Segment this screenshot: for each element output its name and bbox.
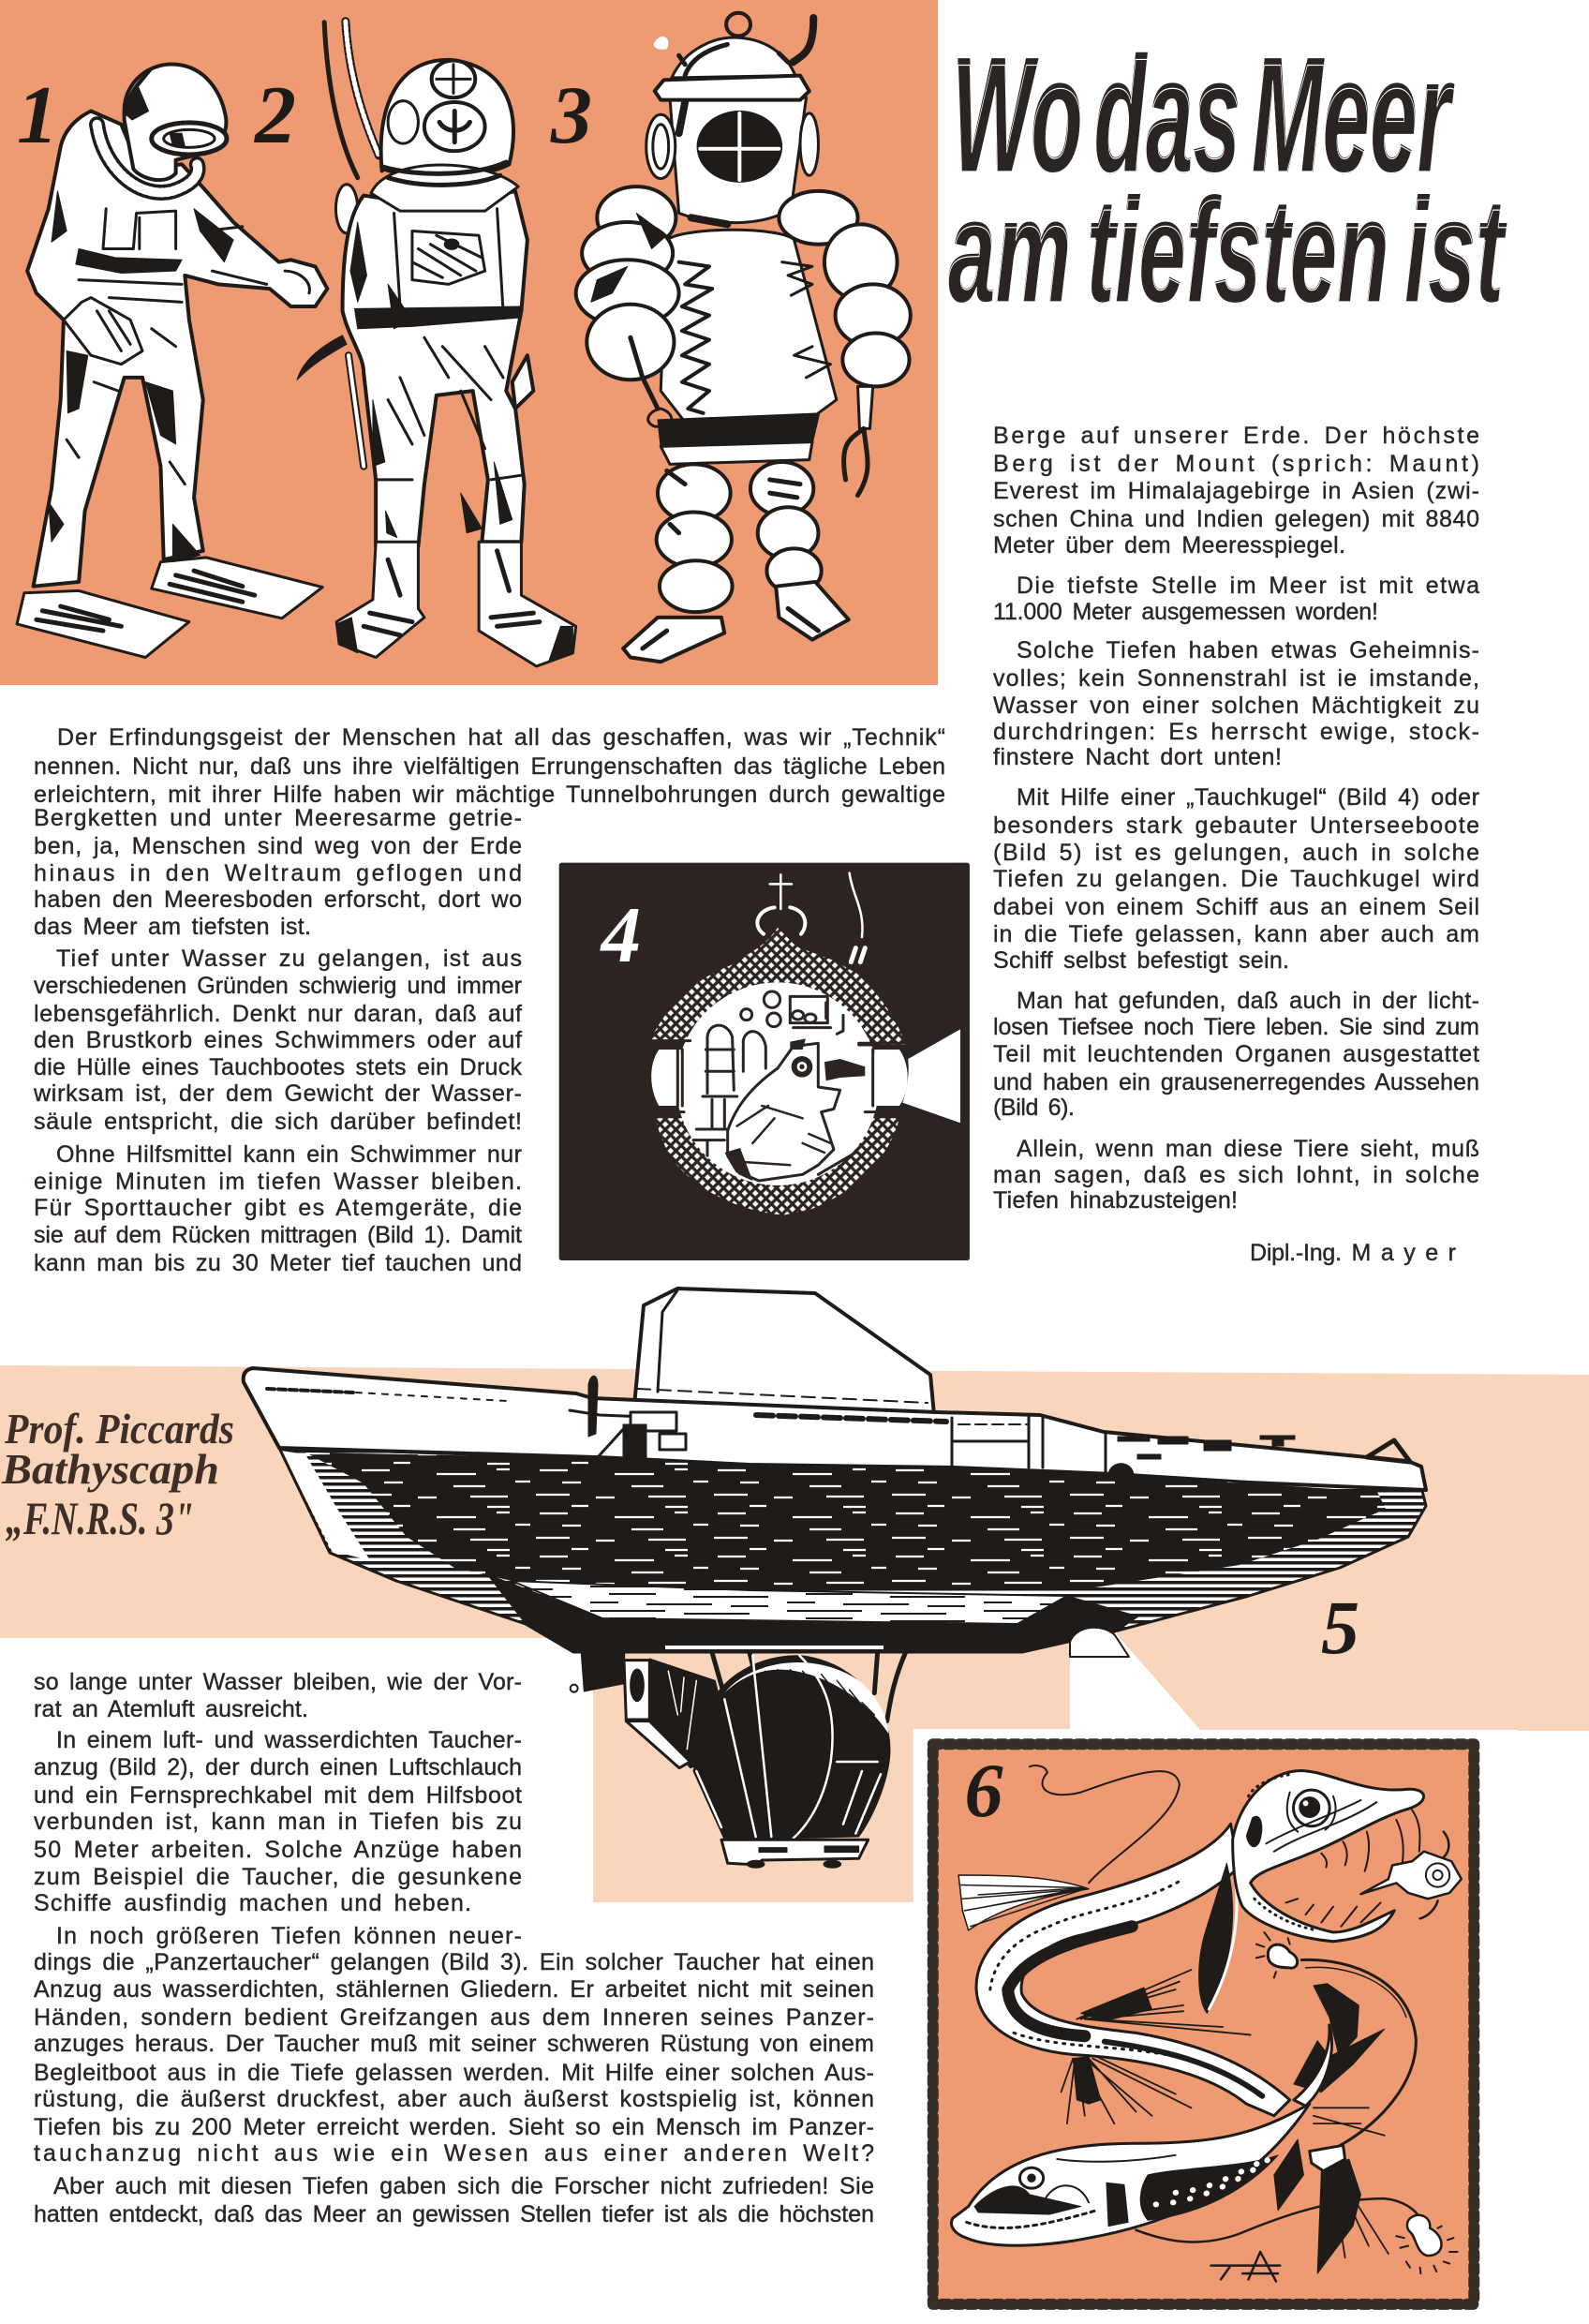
base frame: [721, 1840, 869, 1865]
text block: intro left column: kann man bis zu 30 Meter tief tauchen und: [34, 1250, 522, 1276]
hook and cable: [757, 873, 865, 962]
text block: intro left column: Ohne Hilfsmittel kann ein Schwimmer nur: [56, 1141, 522, 1168]
lower whisker and lure: [1136, 2198, 1458, 2273]
text block: right column: man sagen, daß es sich lohnt, in solche: [993, 1162, 1479, 1188]
long whisker: [1030, 1765, 1180, 1883]
text block: bottom left column: Begleitboot aus in die Tiefe gelassen werden. Mit Hilfe einer solchen Aus-: [34, 2060, 874, 2086]
text block: bottom left column: anzug (Bild 2), der durch einen Luftschlauch: [34, 1754, 522, 1780]
oxygen tanks and instruments: [693, 991, 874, 1155]
text block: right column: dabei von einem Schiff aus an einem Seil: [993, 894, 1479, 920]
dark pectoral fin: [1199, 1863, 1233, 2013]
right arm blobs and claw: [779, 191, 911, 496]
text block: bottom left column: dings die „Panzertaucher“ gelangen (Bild 3). Ein solcher Taucher hat einen: [34, 1949, 874, 1975]
text block: right column: Solche Tiefen haben etwas Geheimnis-: [1017, 637, 1479, 663]
text block: right column: 11.000 Meter ausgemessen worden!: [993, 599, 1378, 625]
submarine illustration 5: [244, 1289, 1426, 1657]
notch behind keel: [1070, 1628, 1129, 1657]
text block: right column: besonders stark gebauter Unterseeboote: [993, 812, 1479, 839]
diver numbers 1 2 3: 1: [17, 70, 58, 161]
sphere highlights: [724, 1662, 888, 1734]
light beam: [902, 1029, 960, 1123]
white upper deck: [244, 1368, 1426, 1490]
text block: right column: (Bild 6).: [993, 1095, 1075, 1121]
lure stalk and lure: [1256, 1932, 1416, 2152]
text block: bottom left column: zum Beispiel die Taucher, die gesunkene: [34, 1864, 522, 1890]
text block: intro left column: den Brustkorb eines Schwimmers oder auf: [34, 1027, 522, 1053]
white mount box: [624, 1661, 649, 1720]
body shading and spots: [990, 1879, 1262, 2096]
author credit: Dipl.-Ing. M a y e r: [1250, 1240, 1456, 1266]
text block: right column: Allein, wenn man diese Tiere sieht, muß: [1017, 1136, 1479, 1162]
peach background band for submarine: [0, 1365, 1589, 1902]
text block: bottom left column: Schiffe ausfindig machen und heben.: [34, 1890, 471, 1916]
sphere hatched shell: [649, 928, 906, 1215]
text block: right column: Die tiefste Stelle im Meer ist mit etwa: [1017, 573, 1479, 599]
text block: intro left column: erleichtern, mit ihrer Hilfe haben wir mächtige Tunnelbohrungen durch gewaltige: [34, 782, 945, 808]
text block: right column: finstere Nacht dort unten!: [993, 744, 1282, 770]
label: Prof. Piccards Bathyscaph: Prof. Piccards: [4, 1405, 234, 1452]
diver numbers 1 2 3: [17, 70, 592, 161]
dark hatched hull: [305, 1452, 1386, 1590]
text block: intro left column: hinaus in den Weltraum geflogen und: [34, 860, 522, 886]
panel: orange divers background: [0, 0, 938, 685]
small propeller and machinery: [588, 1376, 598, 1437]
text block: right column: schen China und Indien gelegen) mit 8840: [993, 506, 1479, 532]
legs: [623, 462, 849, 662]
observer crouching at window: [724, 1038, 865, 1181]
prey fish: [1360, 1832, 1462, 1918]
text block: right column: Man hat gefunden, daß auch in der licht-: [1017, 988, 1479, 1014]
text block: bottom left column: In noch größeren Tiefen können neuer-: [56, 1923, 522, 1949]
text block: intro left column: Bergketten und unter Meeresarme getrie-: [34, 805, 522, 831]
text block: intro left column: die Hülle eines Tauchbootes stets ein Druck: [34, 1054, 523, 1080]
lower fish body: [952, 2104, 1310, 2245]
side windows: [651, 1050, 908, 1106]
text block: bottom left column: rüstung, die äußerst druckfest, aber auch äußerst kostspielig ist, können: [34, 2086, 874, 2112]
text block: intro left column: Tief unter Wasser zu gelangen, ist aus: [56, 946, 522, 972]
text block: right column: Wasser von einer solchen Mächtigkeit zu: [993, 693, 1479, 719]
label: Prof. Piccards Bathyscaph: Bathyscaph: [1, 1445, 219, 1493]
upper fish body: [976, 1824, 1290, 2116]
text block: intro left column: sie auf dem Rücken mittragen (Bild 1). Damit: [34, 1222, 522, 1248]
text block: right column: Berg ist der Mount (sprich: Maunt): [993, 451, 1479, 477]
text block: intro left column: haben den Meeresboden erforscht, dort wo: [34, 886, 522, 913]
label: Prof. Piccards Bathyscaph: [1, 1405, 234, 1544]
hull: [279, 1448, 1426, 1652]
text block: bottom left column: [34, 1669, 874, 2227]
sphere with funnel: [693, 1656, 890, 1840]
text block: intro left column: ben, ja, Menschen sind weg von der Erde: [34, 833, 522, 859]
text block: bottom left column: verbunden ist, kann man in Tiefen bis zu: [34, 1809, 522, 1835]
text block: bottom left column: Anzug aus wasserdichten, stählernen Gliedern. Er arbeitet nicht mit seinen: [34, 1976, 874, 2003]
text block: right column: Tiefen zu gelangen. Die Tauchkugel wird: [993, 866, 1479, 892]
text block: right column: durchdringen: Es herrscht ewige, stock-: [993, 719, 1479, 745]
diver numbers 1 2 3: 2: [253, 70, 296, 161]
text block: right column: Tiefen hinabzusteigen!: [993, 1187, 1238, 1214]
text block: bottom left column: tauchanzug nicht aus wie ein Wesen aus einer anderen Welt?: [34, 2140, 874, 2167]
head and jaws: [1233, 1770, 1424, 1942]
text block: right column: Schiff selbst befestigt sein.: [993, 947, 1289, 974]
diver 2: helmet diver with hoses: [297, 22, 576, 666]
deck details: [267, 1376, 1410, 1474]
text block: right column: in die Tiefe gelassen, kann aber auch am: [993, 921, 1479, 947]
text block: intro left column: nennen. Nicht nur, daß uns ihre vielfältigen Errungenschaften das tägliche Leben: [34, 753, 945, 780]
text block: bottom left column: In einem luft- und wasserdichten Taucher-: [56, 1727, 522, 1753]
text block: bottom left column: rat an Atemluft ausreicht.: [34, 1696, 308, 1722]
panel: diving sphere illustration 4: [559, 863, 970, 1260]
text block: intro left column: Für Sporttaucher gibt es Atemgeräte, die: [34, 1195, 522, 1221]
left arm blobs: [576, 186, 679, 426]
text block: bottom left column: anzuges heraus. Der Taucher muß mit seiner schweren Rüstung von einem: [34, 2031, 874, 2057]
text block: intro left column: das Meer am tiefsten ist.: [34, 914, 311, 940]
number 5: 5: [1321, 1585, 1359, 1670]
text block: intro left column: Der Erfindungsgeist der Menschen hat all das geschaffen, was wir „Technik“: [57, 724, 945, 751]
text block: bottom left column: Händen, sondern bedient Greifzangen aus dem Inneren seines Panzer-: [34, 2004, 874, 2031]
dark keel base: [487, 1574, 1138, 1652]
diver numbers 1 2 3: 3: [550, 70, 592, 161]
title: [948, 24, 1507, 334]
text block: right column: [993, 423, 1479, 1214]
text block: bottom left column: so lange unter Wasser bleiben, wie der Vor-: [34, 1669, 522, 1695]
tail fin of upper fish: [958, 1875, 1089, 1930]
keel plate: [512, 1581, 1067, 1624]
text block: intro left column: verschiedenen Gründen schwierig und immer: [34, 973, 522, 999]
teeth: [1285, 1810, 1419, 1927]
diver 3: armoured diving suit: [576, 13, 911, 662]
struts: [712, 1652, 906, 1721]
gondola under submarine: [571, 1649, 906, 1868]
text block: intro left column: lebensgefährlich. Denkt nur daran, daß auf: [34, 1001, 522, 1027]
lower fish markings: [967, 2155, 1278, 2227]
text block: intro left column: wirksam ist, der dem Gewicht der Wasser-: [33, 1080, 522, 1107]
text block: right column: Teil mit leuchtenden Organen ausgestattet: [993, 1041, 1479, 1067]
diver 1: scuba diver with fins: [17, 65, 327, 658]
text block: intro left column: einige Minuten im tiefen Wasser bleiben.: [34, 1169, 522, 1195]
text block: bottom left column: hatten entdeckt, daß das Meer an gewissen Stellen tiefer ist als die höchsten: [34, 2201, 874, 2227]
number 4: 4: [600, 891, 641, 979]
white forward hull edge: [281, 1451, 370, 1560]
conning tower: [634, 1289, 934, 1415]
text block: right column: losen Tiefsee noch Tiere leben. Sie sind zum: [993, 1014, 1479, 1040]
pipe at foot: [818, 1153, 855, 1174]
panel: deep-sea fish illustration 6: [913, 1730, 1518, 2324]
artist signature: [1211, 2252, 1280, 2282]
text block: right column: (Bild 5) ist es gelungen, auch in solche: [993, 840, 1479, 866]
illustration: three divers: [17, 13, 911, 666]
text block: right column: Mit Hilfe einer „Tauchkugel“ (Bild 4) oder: [1017, 784, 1479, 811]
text block: right column: Berge auf unserer Erde. Der höchste: [993, 423, 1479, 449]
rear leg: [581, 1649, 625, 1691]
rear fins: [1274, 1984, 1389, 2273]
text block: bottom left column: Tiefen bis zu 200 Meter erreicht werden. Sieht so ein Mensch im Panzer-: [34, 2114, 874, 2140]
sphere interior: [676, 982, 879, 1185]
text block: right column: Meter über dem Meeresspiegel.: [993, 532, 1345, 559]
forward mount: [649, 1659, 721, 1768]
text block: intro left column: [33, 724, 945, 1276]
text block: intro left column: säule entspricht, die sich darüber befindet!: [34, 1109, 522, 1135]
number 6: 6: [964, 1748, 1003, 1833]
window frames: [646, 1041, 907, 1112]
text block: bottom left column: 50 Meter arbeiten. Solche Anzüge haben: [34, 1837, 522, 1863]
text block: right column: und haben ein grausenerregendes Aussehen: [993, 1069, 1479, 1095]
label: Prof. Piccards Bathyscaph: „F.N.R.S. 3": [6, 1492, 194, 1544]
text block: bottom left column: Aber auch mit diesen Tiefen gaben sich die Forscher nicht zufrieden! Sie: [53, 2173, 874, 2199]
text block: right column: volles; kein Sonnenstrahl ist ie imstande,: [993, 665, 1479, 692]
ray fins: [1062, 1970, 1251, 2123]
text block: right column: Everest im Himalajagebirge in Asien (zwi-: [993, 478, 1479, 504]
text block: bottom left column: und ein Fernsprechkabel mit dem Hilfsboot: [34, 1782, 522, 1809]
